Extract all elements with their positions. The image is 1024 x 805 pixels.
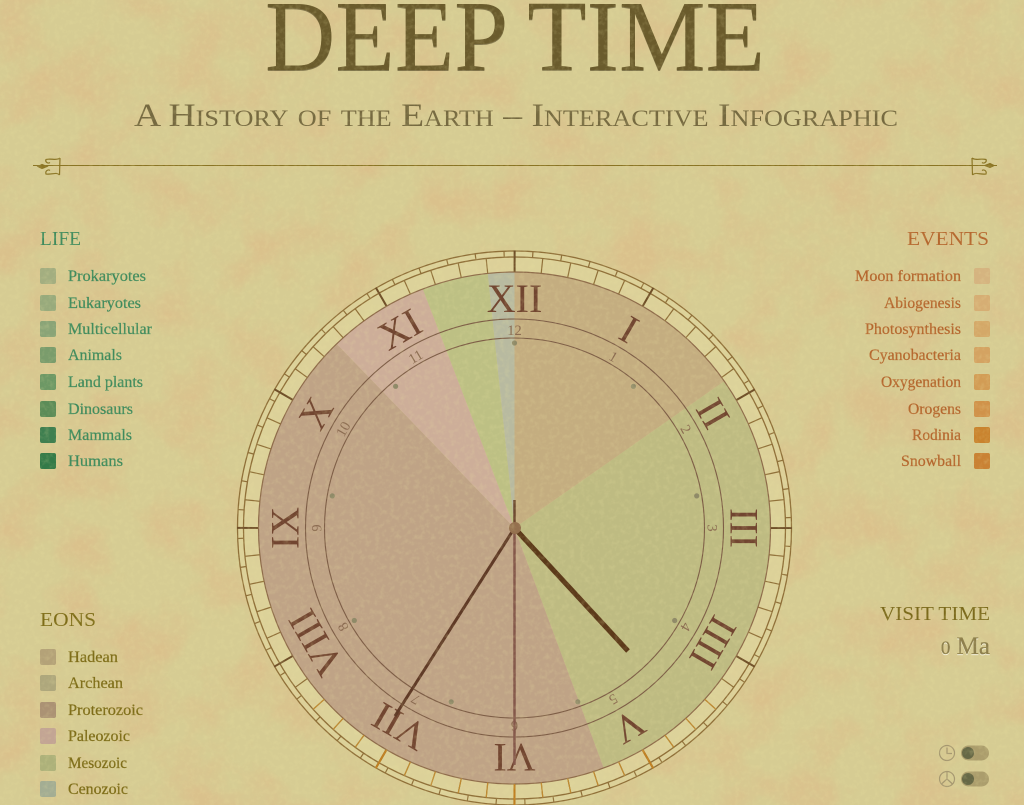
eon: archean	[40, 675, 123, 692]
event: moon formation: Moon formation	[855, 268, 961, 285]
icon: clock	[940, 746, 954, 760]
small hour numbers: 12	[507, 323, 522, 339]
sector: paleozoic	[337, 289, 514, 528]
roman numerals: VII	[364, 693, 435, 760]
life: land plants: Land plants	[68, 374, 143, 391]
small hour numbers: 10	[333, 419, 354, 440]
sector: mesozoic	[423, 273, 514, 528]
life: dinosaurs: Dinosaurs	[68, 401, 133, 418]
sector: archean	[514, 381, 770, 768]
hand: minute	[395, 528, 514, 716]
switch	[961, 746, 989, 760]
eon: archean: Archean	[68, 675, 123, 692]
small hour numbers: 11	[406, 347, 426, 368]
eon: cenozoic	[40, 781, 128, 798]
event: orogens	[908, 401, 990, 418]
event: snowball	[901, 453, 990, 470]
life: dinosaurs	[40, 401, 133, 418]
small hour numbers: 3	[704, 524, 720, 532]
event: orogens: Orogens	[908, 401, 961, 418]
small hour numbers: 8	[335, 619, 353, 634]
ornament: left	[38, 158, 60, 175]
life: eukaryotes: Eukaryotes	[68, 295, 141, 312]
small hour numbers: 9	[310, 524, 326, 532]
event: rodinia: Rodinia	[912, 427, 961, 444]
hand: long vertical	[513, 500, 516, 765]
roman numerals: XI	[370, 299, 429, 359]
icon: peace	[940, 772, 954, 786]
life: prokaryotes: Prokaryotes	[68, 268, 146, 285]
heading: life: LIFE	[40, 229, 81, 250]
event: abiogenesis: Abiogenesis	[884, 295, 961, 312]
eon: paleozoic	[40, 728, 130, 745]
eon: cenozoic: Cenozoic	[68, 781, 128, 798]
small hour numbers: 5	[606, 690, 620, 707]
eon: proterozoic: Proterozoic	[68, 702, 143, 719]
heading: events: EVENTS	[907, 229, 989, 250]
roman numerals: XII	[487, 276, 542, 321]
tick band backing	[248, 262, 781, 794]
inner rings	[306, 319, 724, 737]
toggle: clock mode	[940, 746, 989, 760]
event: photosynthesis: Photosynthesis	[865, 321, 961, 338]
life: mammals	[40, 427, 132, 444]
eon: hadean: Hadean	[68, 649, 118, 666]
hand: hour	[514, 528, 628, 651]
ornament: right	[972, 158, 994, 175]
roman numerals: VIII	[279, 602, 352, 684]
roman numerals: III	[722, 508, 766, 548]
life: humans: Humans	[68, 453, 123, 470]
life: humans	[40, 453, 123, 470]
eon: hadean	[40, 649, 118, 666]
life: mammals: Mammals	[68, 427, 132, 444]
heading: eons: EONS	[40, 610, 96, 631]
eon: mesozoic: Mesozoic	[68, 755, 127, 772]
small hour numbers: 2	[676, 422, 694, 437]
visit time readout	[880, 603, 990, 660]
small hour numbers: 4	[676, 619, 694, 634]
heading: visit time: VISIT TIME	[880, 603, 990, 625]
roman numerals: I	[612, 306, 646, 352]
eon: mesozoic	[40, 755, 127, 772]
life: prokaryotes	[40, 268, 146, 285]
legend: eons	[40, 610, 143, 798]
switch	[961, 772, 989, 786]
hand pivot	[509, 522, 521, 534]
event: snowball: Snowball	[901, 453, 961, 470]
life: animals: Animals	[68, 347, 122, 364]
roman numerals: V	[605, 700, 653, 754]
legend: life	[40, 229, 153, 470]
toggle: peace mode	[940, 772, 989, 786]
event: oxygenation: Oxygenation	[881, 374, 961, 391]
value: time in Ma: 0 Ma	[941, 633, 990, 660]
small hour numbers	[310, 323, 720, 733]
subtitle: A History of the Earth – Interactive Infographic	[134, 98, 898, 134]
roman numerals: IX	[262, 507, 308, 549]
sector: cenozoic	[488, 272, 514, 528]
small hour numbers: 1	[606, 349, 620, 366]
roman numerals: IIII	[680, 608, 746, 677]
event: cyanobacteria: Cyanobacteria	[869, 347, 961, 364]
life: animals	[40, 347, 122, 364]
sector: hadean	[514, 272, 724, 528]
life: eukaryotes	[40, 295, 141, 312]
life: multicellular: Multicellular	[68, 321, 153, 338]
roman numerals: X	[289, 389, 343, 437]
legend: events	[855, 229, 990, 470]
outer tick scale	[223, 237, 806, 805]
small hour numbers: 6	[511, 717, 518, 733]
marker dots	[330, 340, 699, 704]
roman numerals: VI	[493, 735, 536, 780]
eon: proterozoic	[40, 702, 143, 719]
eon sectors	[259, 272, 770, 784]
small hour numbers: 7	[409, 690, 423, 707]
roman numerals: II	[687, 390, 739, 436]
clock dial	[223, 237, 806, 805]
roman numerals	[262, 276, 766, 780]
eon: paleozoic: Paleozoic	[68, 728, 130, 745]
ornamental divider	[33, 158, 997, 175]
event: rodinia	[912, 427, 990, 444]
sector: proterozoic	[259, 344, 604, 784]
